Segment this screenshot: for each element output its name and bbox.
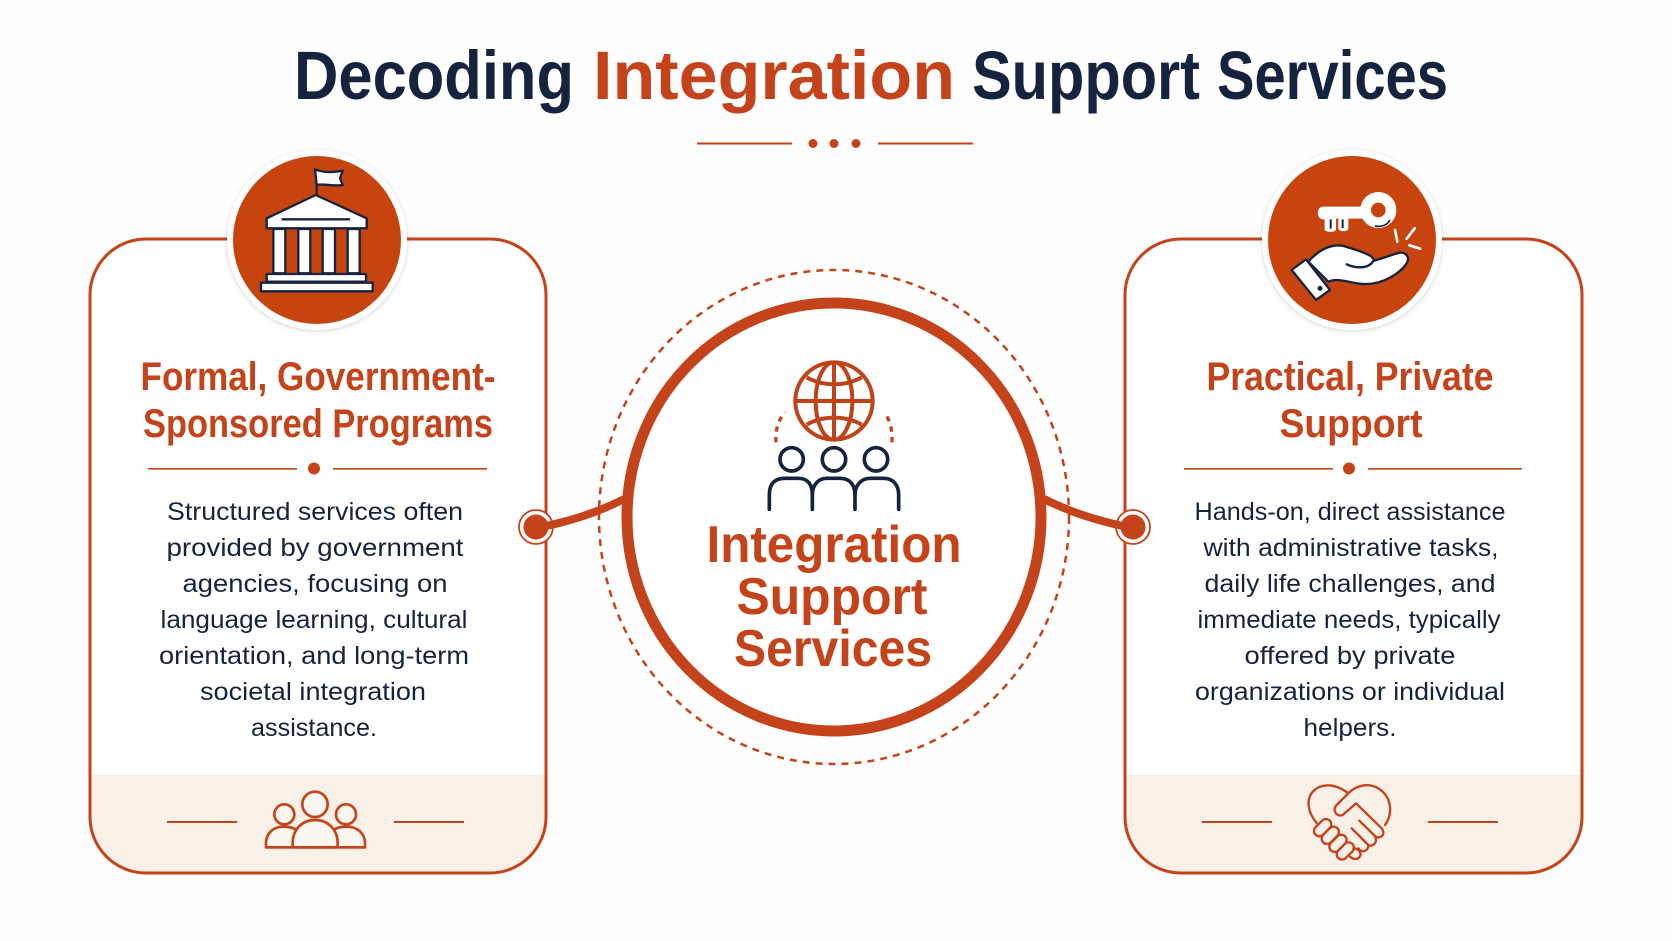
right panel description: helpers. [1304,714,1396,742]
left panel heading [140,355,496,446]
dashed orbit [599,270,1069,764]
title: Integration [593,37,955,114]
icon: group of people [266,792,365,847]
right panel description: immediate needs, typically [1198,606,1501,634]
left connector [519,499,624,544]
icon: key [1318,197,1420,249]
right panel divider [1184,462,1522,474]
right connector [1044,499,1150,544]
left panel divider [148,462,487,474]
right panel heading: Practical, Private [1206,355,1494,399]
hub label: Support [736,568,928,626]
icon: handshake heart [1309,785,1390,862]
left panel description [159,498,469,742]
title [294,37,1448,114]
title: Decoding [294,37,574,114]
right panel description: offered by private [1244,642,1456,670]
right panel description [1194,498,1506,742]
hub label [706,516,962,678]
panel: practical private support [1125,239,1582,873]
left panel description: provided by government [166,534,464,562]
right footer rules [1202,821,1498,823]
icon: building [261,169,373,291]
left panel description: language learning, cultural [160,606,468,634]
title: Services [1217,37,1448,114]
left panel footer band [90,775,546,873]
left panel description: orientation, and long-term [159,642,469,670]
right panel description: Hands-on, direct assistance [1194,498,1506,526]
icon badge: key over hand [1262,150,1442,330]
hub ring [627,303,1041,731]
left footer rules [167,821,464,823]
left panel description: assistance. [251,714,377,742]
icon: globe [795,362,873,440]
panel: formal government-sponsored programs [90,239,546,873]
right panel description: daily life challenges, and [1204,570,1496,598]
left panel heading: Formal, Government- [140,355,496,399]
hub label: Integration [706,516,962,574]
right panel description: organizations or individual [1195,678,1505,706]
central hub [599,270,1069,764]
right panel heading [1206,355,1494,446]
left panel description: agencies, focusing on [182,570,448,598]
icon: dashed arcs [776,412,892,442]
right panel heading: Support [1280,402,1422,446]
icon badge: government building [227,150,407,330]
right panel footer band [1125,775,1582,873]
left panel description: societal integration [200,678,426,706]
icon: three people [769,448,899,509]
title: Support [972,37,1200,114]
hub label: Services [734,620,932,678]
icon: open hand [1292,245,1408,300]
right panel description: with administrative tasks, [1202,534,1498,562]
left panel description: Structured services often [167,498,463,526]
left panel heading: Sponsored Programs [143,402,493,446]
title ornament [697,139,973,148]
